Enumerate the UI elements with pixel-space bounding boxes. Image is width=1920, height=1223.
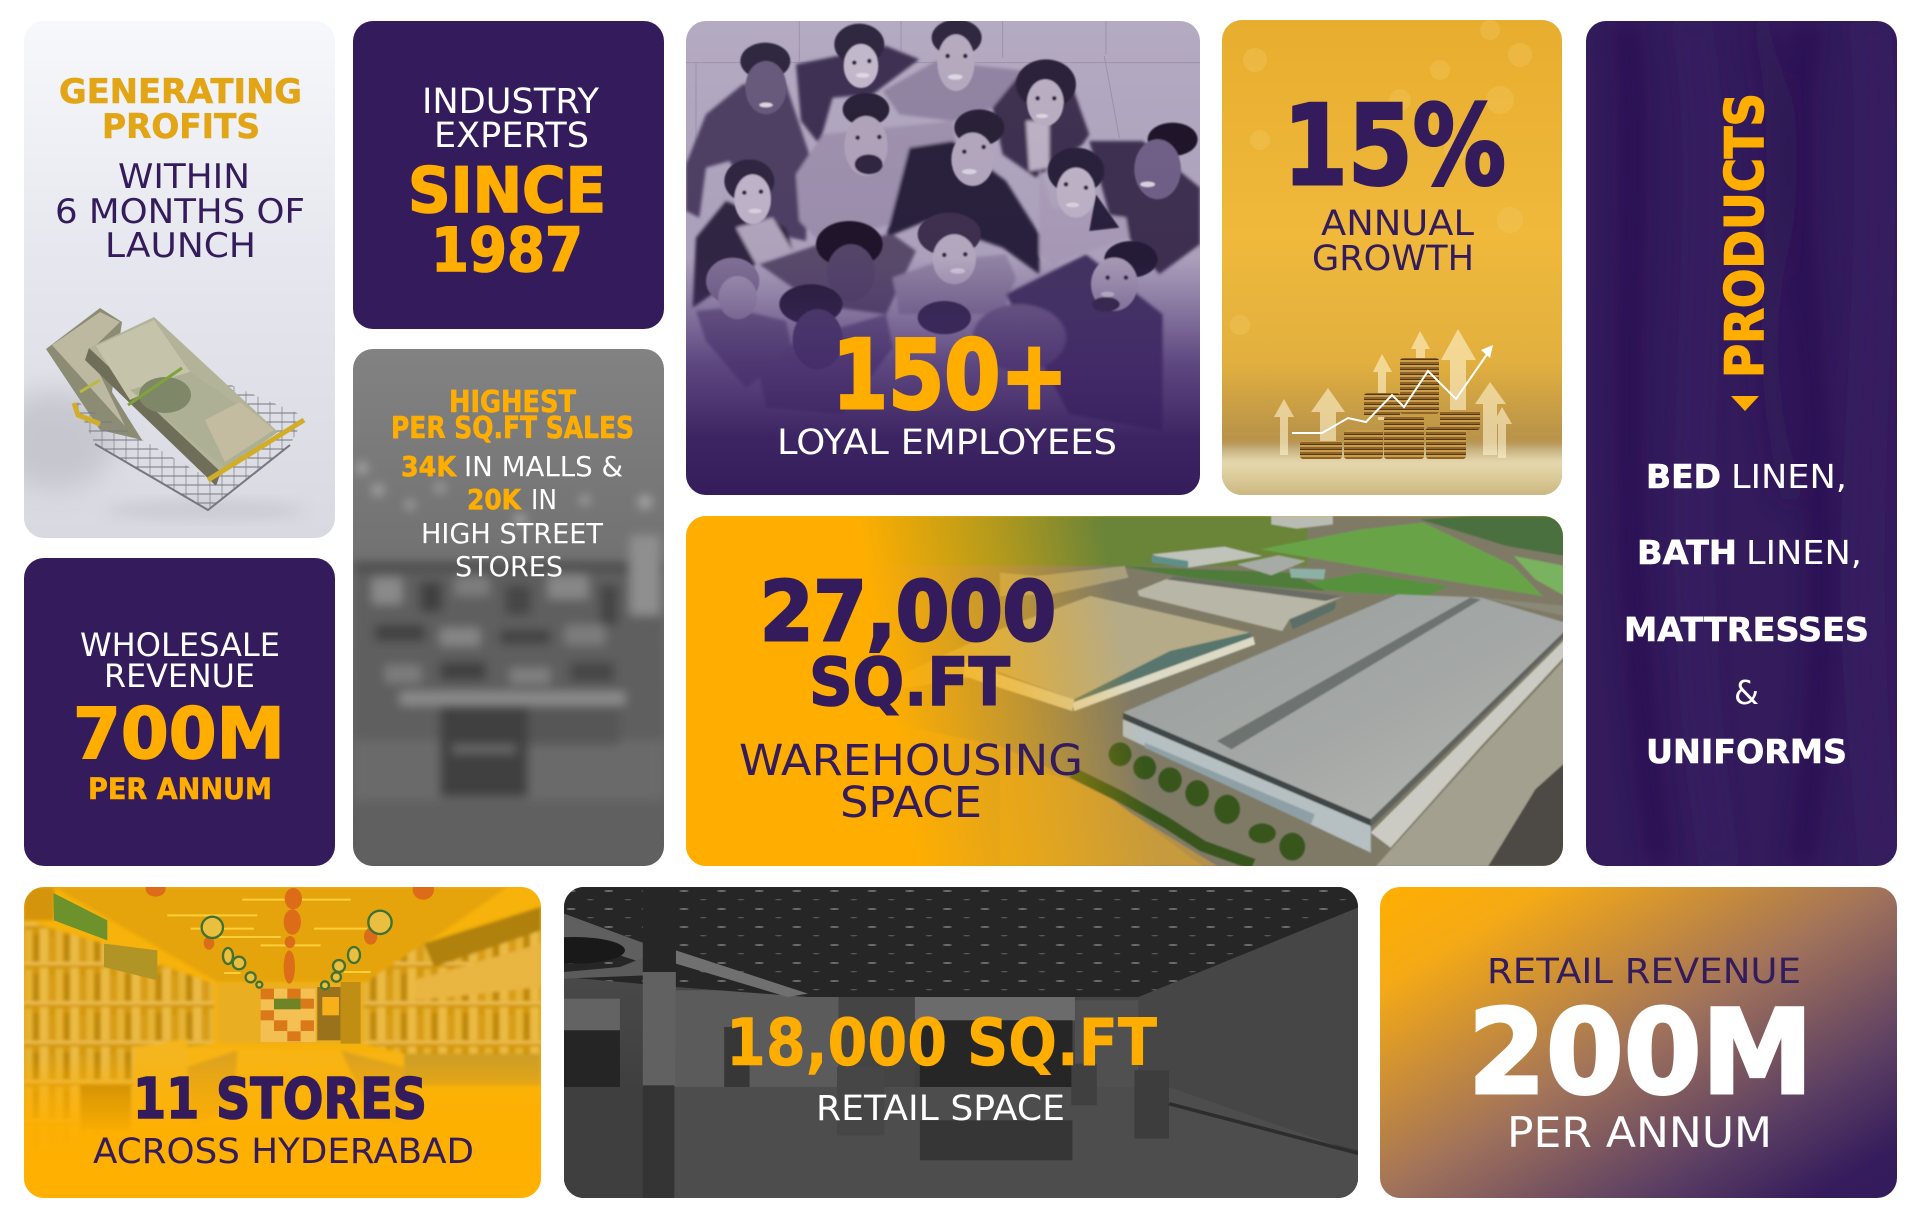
heading: products: PRODUCTS xyxy=(1715,93,1776,378)
text: retail space: RETAIL SPACE xyxy=(816,1089,1065,1129)
icon: coins and rising arrows xyxy=(1274,329,1512,459)
panel: stores xyxy=(24,880,541,1198)
icon: money basket xyxy=(46,308,304,510)
stat: 15%: 15% xyxy=(1283,82,1506,211)
panel: retail space xyxy=(523,887,1359,1198)
stat: 200M: 200M xyxy=(1468,984,1813,1121)
faces and hair xyxy=(706,19,1198,369)
stat: 27,000 sq.ft: SQ.FT xyxy=(809,644,1010,721)
text: retail revenue: RETAIL REVENUE xyxy=(1487,952,1801,992)
text: sales per location: 34K xyxy=(401,450,457,483)
stat: 18,000 sq.ft: 18,000 SQ.FT xyxy=(726,1006,1157,1081)
overlay: purple fade xyxy=(686,21,1200,495)
stat: since 1987: SINCE xyxy=(408,154,606,227)
overlay: amber fade xyxy=(686,516,1142,866)
text: annual growth xyxy=(1314,210,1474,270)
text: industry experts: INDUSTRY xyxy=(422,82,600,122)
text: within six months: WITHIN xyxy=(118,157,250,197)
heading: highest per sq.ft sales: PER SQ.FT SALES xyxy=(391,411,634,446)
panel: loyal employees xyxy=(686,19,1200,495)
stat: 700M: 700M xyxy=(73,693,285,775)
illustration: warehouse aerial view xyxy=(855,516,1579,869)
text: industry experts xyxy=(422,82,600,156)
illustration: store interior xyxy=(24,887,541,1126)
heading: generating profits xyxy=(60,78,300,139)
panel: highest per sq.ft sales xyxy=(353,349,664,866)
arrow: down xyxy=(1731,396,1759,411)
panel: products xyxy=(1586,21,1897,866)
list: product categories: BATH xyxy=(1637,533,1737,572)
text: within six months: LAUNCH xyxy=(105,226,256,266)
list: product categories: LINEN, xyxy=(1746,533,1862,572)
list: product categories: & xyxy=(1734,673,1759,712)
text: warehousing space xyxy=(740,743,1080,818)
heading: 11 stores: 11 STORES xyxy=(133,1067,427,1132)
text: annual growth: ANNUAL xyxy=(1321,204,1475,244)
text: sales per location: HIGH STREET xyxy=(421,517,604,550)
text: loyal employees: LOYAL EMPLOYEES xyxy=(777,423,1117,463)
list: product categories: MATTRESSES xyxy=(1624,610,1869,649)
list: product categories xyxy=(1624,457,1869,771)
stat: since 1987 xyxy=(408,154,606,286)
text: sales per location: 20K xyxy=(467,483,522,516)
heading: generating profits: PROFITS xyxy=(102,107,260,147)
text: sales per location: IN MALLS & xyxy=(464,450,623,483)
stat: 150+: 150+ xyxy=(832,321,1068,431)
text: wholesale revenue xyxy=(80,626,280,695)
overlay: amber fade xyxy=(24,887,541,1198)
text: industry experts: EXPERTS xyxy=(434,116,589,156)
stat: 27,000 sq.ft: 27,000 xyxy=(760,565,1056,660)
illustration: group of employees xyxy=(686,19,1200,431)
panel: generating profits xyxy=(0,21,335,538)
list: product categories: BED xyxy=(1646,457,1721,496)
floor xyxy=(1222,442,1562,495)
heading: generating profits: GENERATING xyxy=(59,72,302,112)
text: within six months xyxy=(58,163,303,258)
panel: wholesale revenue xyxy=(24,558,335,866)
text: warehousing space: SPACE xyxy=(840,778,982,828)
text: within six months: 6 MONTHS OF xyxy=(55,192,305,232)
text: sales per location: IN xyxy=(531,483,557,516)
illustration: mall interior xyxy=(523,887,1359,1198)
list: product categories: LINEN, xyxy=(1731,457,1847,496)
stat: since 1987: 1987 xyxy=(431,215,583,286)
panel: annual growth xyxy=(1210,20,1574,504)
panel: industry experts xyxy=(353,21,664,329)
text: wholesale revenue: REVENUE xyxy=(104,657,255,695)
list: product categories: UNIFORMS xyxy=(1646,732,1847,771)
text: per annum: PER ANNUM xyxy=(1507,1108,1772,1157)
text: sales per location xyxy=(401,450,623,583)
heading: highest per sq.ft sales: HIGHEST xyxy=(449,385,576,420)
text: per annum: PER ANNUM xyxy=(88,772,272,806)
heading: highest per sq.ft sales xyxy=(393,389,632,443)
text: warehousing space: WAREHOUSING xyxy=(739,736,1083,786)
text: across hyderabad: ACROSS HYDERABAD xyxy=(93,1132,474,1172)
panel: retail revenue xyxy=(1380,887,1897,1198)
text: sales per location: STORES xyxy=(455,550,563,583)
panel: warehousing space xyxy=(686,516,1579,869)
stat: 27,000 sq.ft xyxy=(764,578,1054,716)
overlay: darken xyxy=(564,887,1358,1198)
text: annual growth: GROWTH xyxy=(1312,239,1474,279)
text: wholesale revenue: WHOLESALE xyxy=(80,626,280,664)
